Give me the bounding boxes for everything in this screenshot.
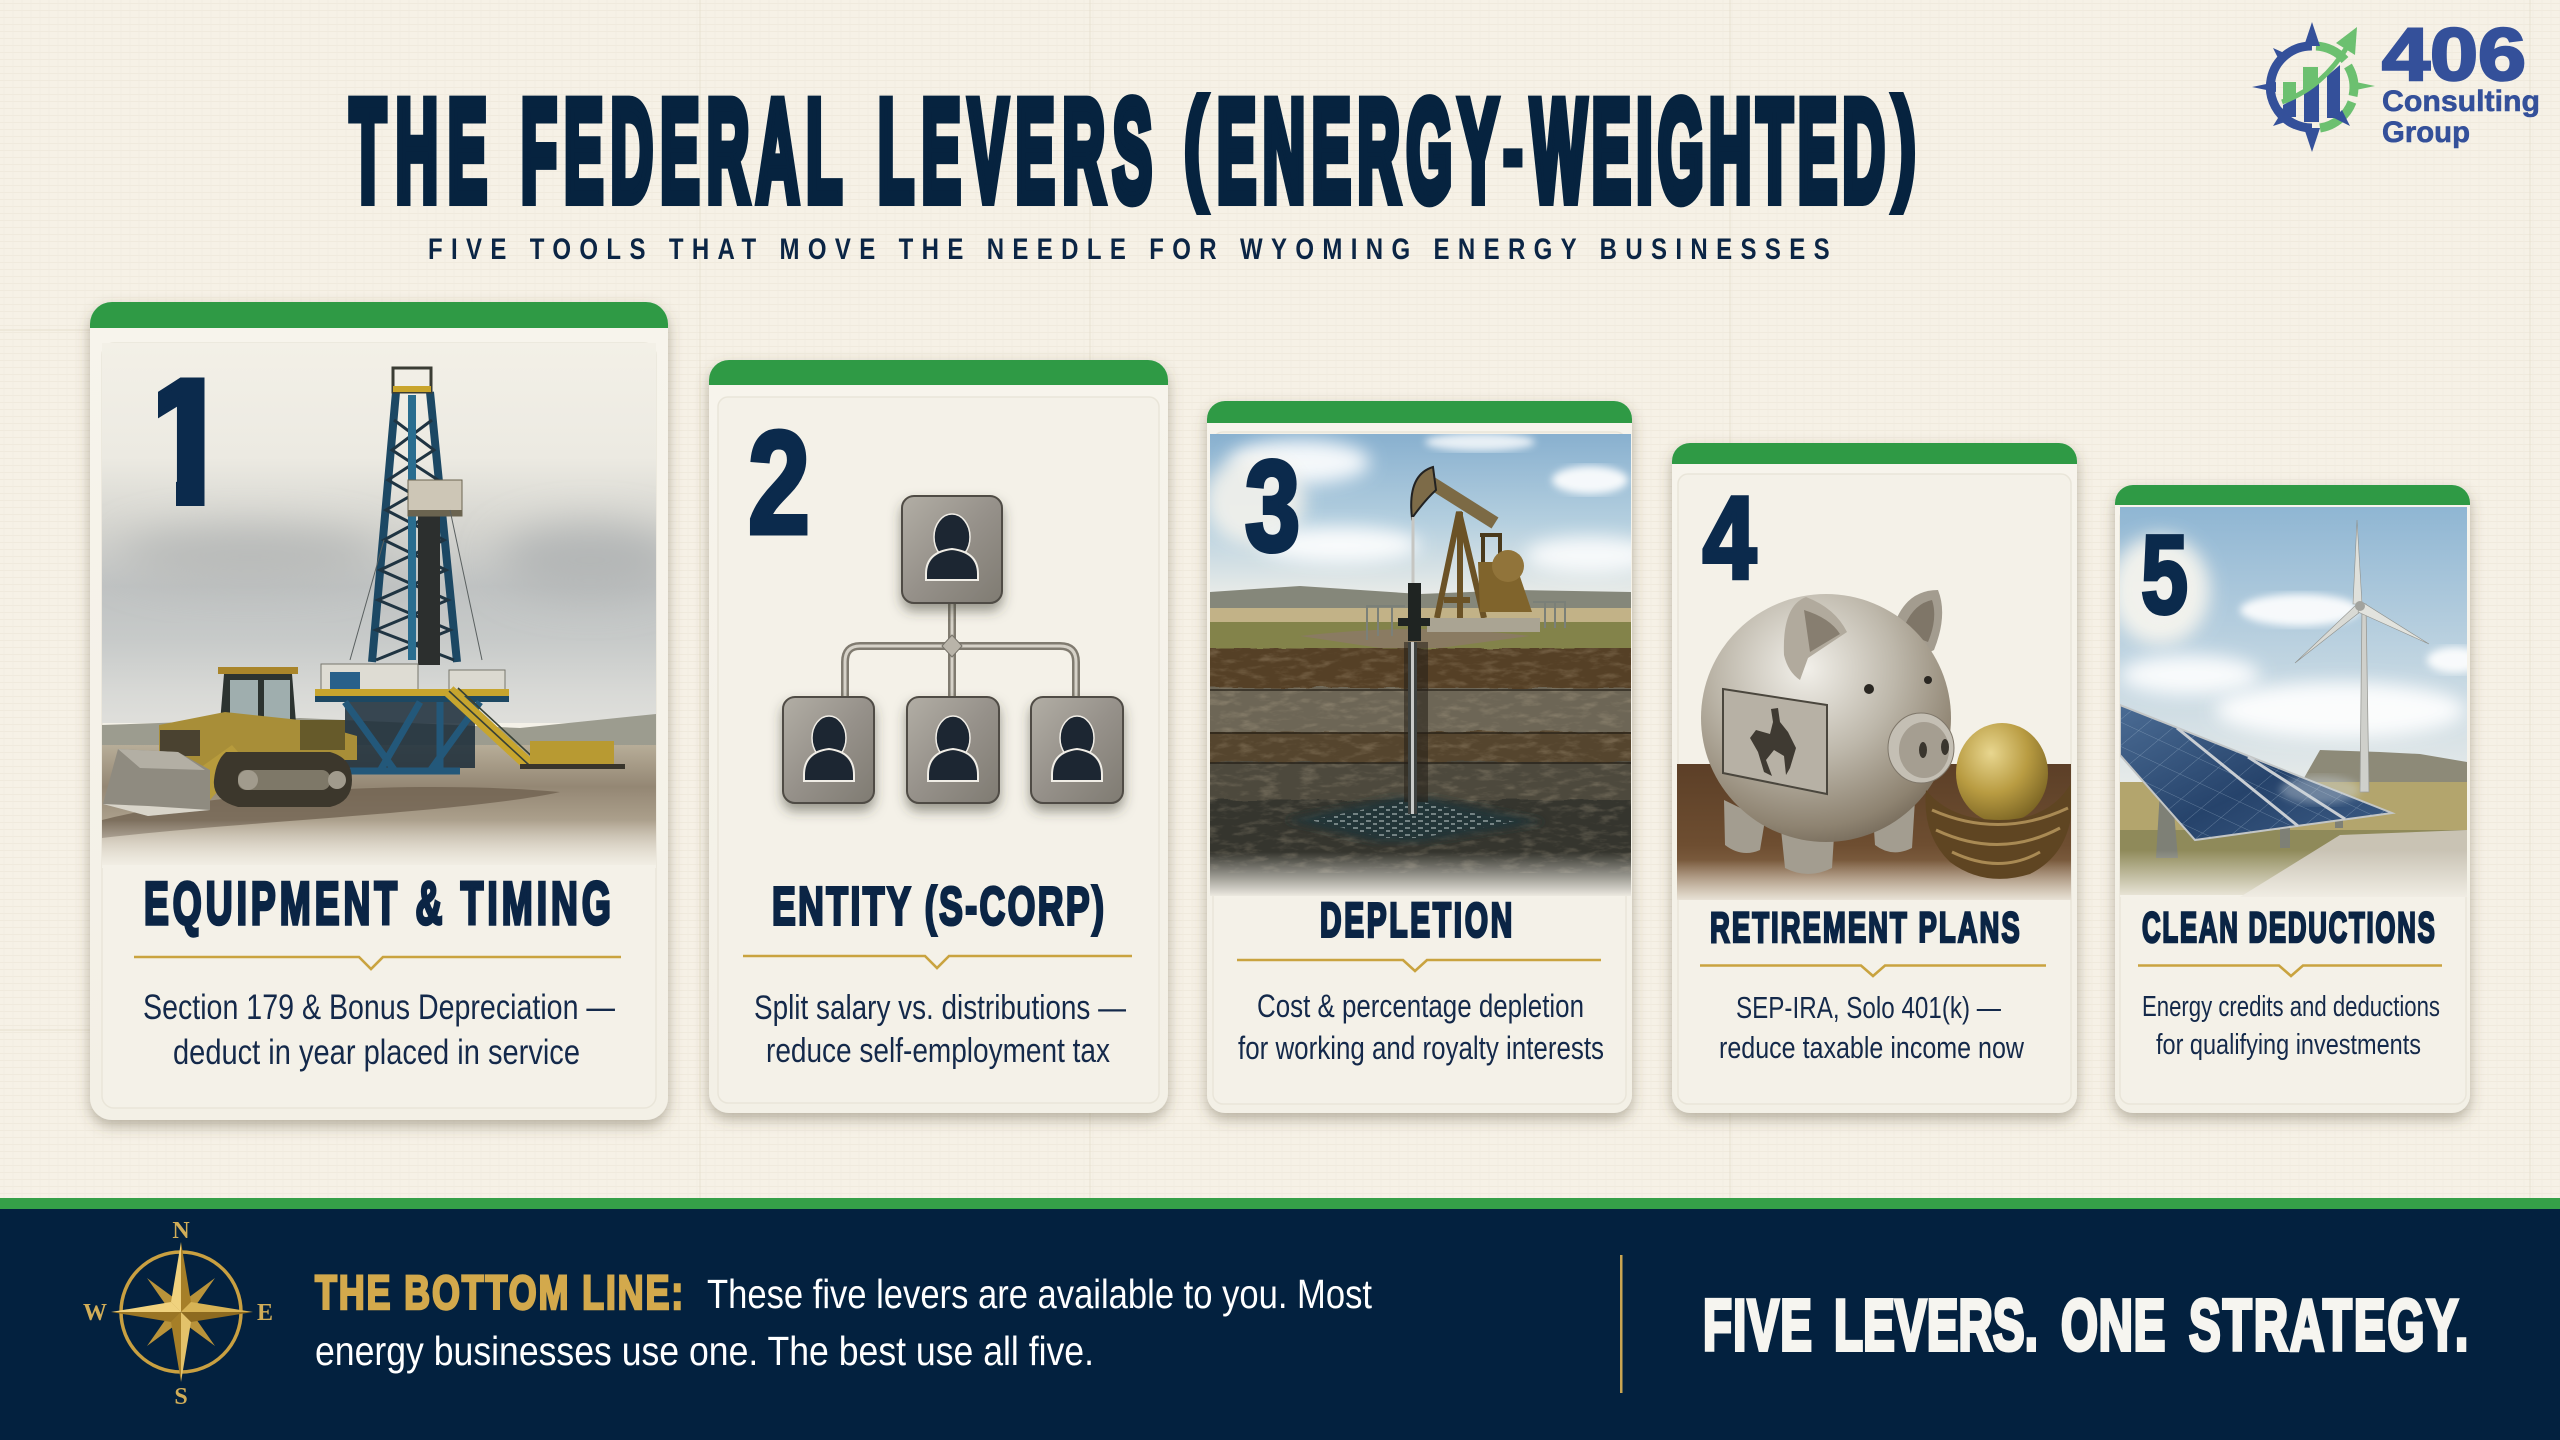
bottom line text: These five levers are available to you. Most <box>707 1271 1373 1317</box>
description: reduce self-employment tax <box>766 1032 1110 1070</box>
divider <box>743 956 1132 968</box>
pump jack <box>1367 467 1565 814</box>
description: SEP-IRA, Solo 401(k) — <box>1736 990 2001 1025</box>
tagline: FIVE <box>1703 1285 1812 1365</box>
description: Split salary vs. distributions — <box>754 989 1126 1027</box>
description <box>2142 991 2440 1061</box>
description: Energy credits and deductions <box>2142 991 2440 1023</box>
description: reduce taxable income now <box>1719 1030 2024 1065</box>
rock texture <box>1210 648 1631 873</box>
title: LEVERS <box>878 72 1152 231</box>
tile left <box>783 697 874 803</box>
tagline: STRATEGY. <box>2189 1285 2468 1365</box>
card 5 body <box>2115 485 2470 1113</box>
title: ( <box>1183 73 1208 213</box>
divider <box>1700 966 2046 976</box>
heading: entity s-corp: ENTITY (S-CORP) <box>772 876 1104 936</box>
icon: gold compass: E <box>257 1300 273 1326</box>
logo wordmark: Consulting <box>2382 85 2540 118</box>
divider <box>1237 960 1601 971</box>
title: - <box>1501 66 1525 225</box>
illustration: solar panels and wind turbine <box>2110 507 2483 902</box>
bulldozer <box>103 667 357 816</box>
divider <box>1620 1255 1622 1393</box>
icon: gold compass <box>83 1218 273 1410</box>
reservoir <box>1285 797 1545 842</box>
illustration: org chart <box>783 496 1123 803</box>
logo wordmark <box>2382 13 2540 149</box>
numeral 1: 1 <box>138 342 238 541</box>
numeral 2: 2 <box>748 401 810 564</box>
description: for qualifying investments <box>2156 1029 2421 1061</box>
tagline <box>1703 1285 2468 1365</box>
illustration: piggy bank and golden egg <box>1677 590 2073 906</box>
description <box>143 988 615 1072</box>
description: for working and royalty interests <box>1238 1030 1604 1066</box>
divider <box>134 957 621 969</box>
description <box>754 989 1126 1070</box>
icon: gold compass: S <box>174 1384 188 1410</box>
bottom line text: THE BOTTOM LINE: <box>315 1266 683 1319</box>
description: deduct in year placed in service <box>173 1033 580 1072</box>
icon: gold compass: N <box>172 1218 190 1244</box>
tile centre <box>907 697 999 803</box>
icon: gold compass: W <box>83 1300 107 1326</box>
numeral 3: 3 <box>1245 435 1300 578</box>
logo compass mark <box>2252 22 2375 152</box>
panel: 4 retirement plans <box>1672 443 2077 1113</box>
title: WEIGHTED <box>1531 72 1885 231</box>
panel: 3 depletion <box>1200 401 1655 1113</box>
title: THE <box>350 72 487 231</box>
divider <box>2138 966 2442 976</box>
tagline: ONE <box>2061 1285 2165 1365</box>
description: Cost & percentage depletion <box>1257 988 1584 1024</box>
title: ENERGY <box>1217 72 1498 231</box>
bottom line text <box>315 1266 1373 1374</box>
logo wordmark: Group <box>2382 116 2470 149</box>
logo wordmark: 406 <box>2382 13 2526 96</box>
description <box>1719 990 2024 1065</box>
numeral 4: 4 <box>1703 473 1756 603</box>
nest and golden egg <box>1926 723 2073 879</box>
description: Section 179 & Bonus Depreciation — <box>143 988 615 1027</box>
heading: depletion: DEPLETION <box>1320 894 1512 947</box>
owner tile <box>902 496 1002 603</box>
card 2 body <box>709 360 1168 1113</box>
rock strata <box>1200 648 1641 900</box>
connectors <box>845 603 1076 697</box>
footer banner <box>0 1198 2560 1440</box>
card 4 body <box>1672 443 2077 1113</box>
card 3 body <box>1207 401 1632 1113</box>
title: ) <box>1892 73 1917 213</box>
heading: equipment and timing: EQUIPMENT & TIMING <box>144 870 611 937</box>
title <box>350 66 1917 231</box>
panel: 1 equipment and timing <box>90 302 680 1120</box>
illustration: pump jack and reservoir <box>1200 433 1655 900</box>
title: FEDERAL <box>521 72 842 231</box>
heading: clean deductions: CLEAN DEDUCTIONS <box>2142 903 2435 952</box>
subtitle: FIVE TOOLS THAT MOVE THE NEEDLE FOR WYOMING ENERGY BUSINESSES <box>428 231 1830 266</box>
description <box>1238 988 1604 1066</box>
panel: 5 clean deductions <box>2110 485 2483 1113</box>
tagline: LEVERS. <box>1834 1285 2038 1365</box>
solar panels <box>2120 705 2392 858</box>
drilling rig <box>315 368 625 771</box>
logo: 406 Consulting Group <box>2252 13 2540 152</box>
wind turbine <box>2295 520 2429 792</box>
tile right <box>1031 697 1123 803</box>
piggy bank <box>1701 590 1954 874</box>
bottom line text: energy businesses use one. The best use all five. <box>315 1328 1094 1374</box>
panel: 2 entity s-corp <box>709 360 1168 1113</box>
card 1 body <box>90 302 668 1120</box>
heading: retirement plans: RETIREMENT PLANS <box>1710 903 2020 952</box>
numeral 5: 5 <box>2141 513 2188 637</box>
illustration: drilling rig and bulldozer <box>102 343 680 870</box>
